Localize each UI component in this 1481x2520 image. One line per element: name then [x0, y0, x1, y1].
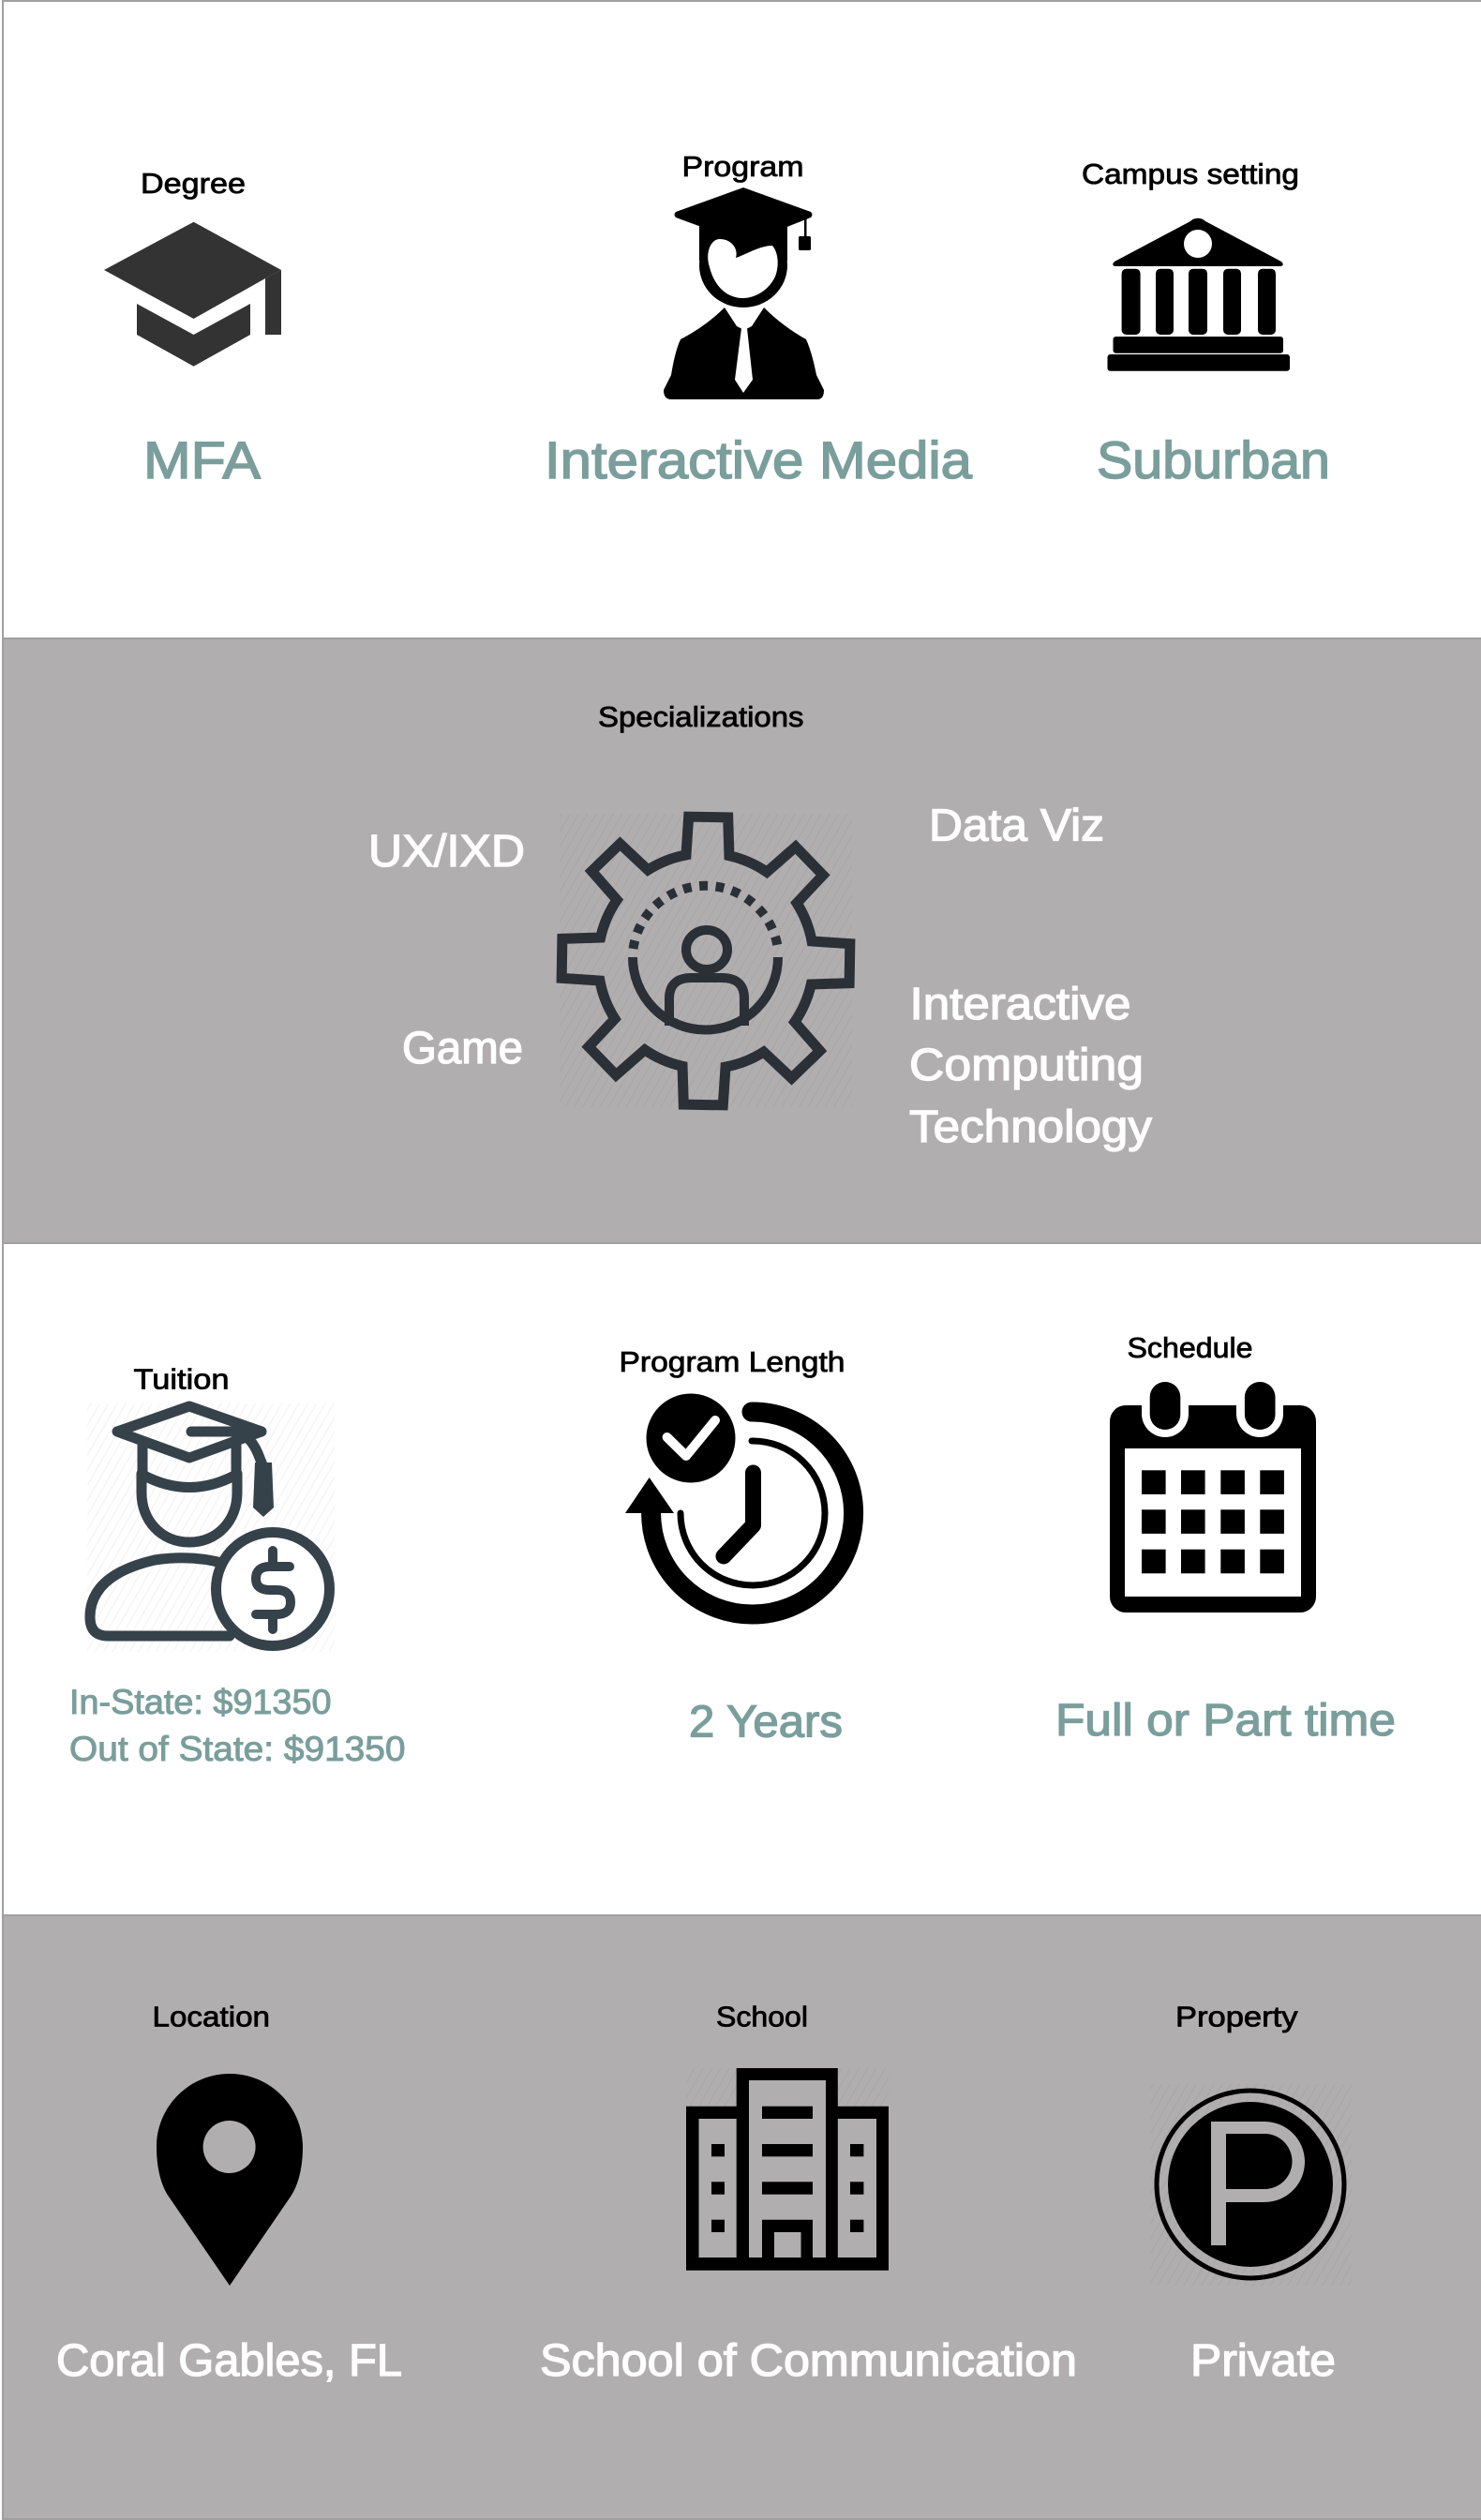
- heading: Schedule: Schedule: [1127, 1331, 1252, 1364]
- heading: Tuition: Tuition: [133, 1363, 229, 1396]
- heading: Degree: Degree: [141, 167, 246, 200]
- text: Interactive Computing Technology: Technology: [909, 1102, 1152, 1152]
- icon: mortarboard: [104, 222, 281, 367]
- heading: School: School: [716, 2001, 808, 2033]
- value: Interactive Media: Interactive Media: [545, 430, 973, 489]
- heading: Program Length: Program Length: [619, 1345, 845, 1378]
- icon: campus building: [1108, 218, 1290, 371]
- text: Interactive Computing Technology: Computing: [909, 1041, 1144, 1090]
- icon: calendar: [1110, 1382, 1316, 1612]
- icon: map pin: [157, 2074, 303, 2286]
- icon: P in circle: [1150, 2084, 1352, 2286]
- text: Game: Game: [402, 1024, 523, 1073]
- value: 2 Years: 2 Years: [689, 1697, 843, 1748]
- heading: Program: Program: [682, 150, 804, 183]
- value: MFA: MFA: [143, 430, 262, 489]
- icon: school building: [686, 2068, 889, 2271]
- icon: gear with person: [560, 814, 852, 1107]
- text: Data Viz: Data Viz: [929, 801, 1104, 851]
- heading: Location: Location: [152, 2001, 270, 2033]
- value: tuition amounts: Out of State: $91350: [69, 1730, 405, 1768]
- value: Suburban: Suburban: [1097, 430, 1330, 489]
- text: Interactive Computing Technology: [909, 980, 1152, 1152]
- heading: Specializations: Specializations: [598, 700, 804, 733]
- heading: Campus setting: Campus setting: [1082, 158, 1299, 190]
- value: Full or Part time: Full or Part time: [1055, 1696, 1396, 1746]
- value: tuition amounts: In-State: $91350: [69, 1683, 332, 1721]
- value: Coral Gables, FL: Coral Gables, FL: [56, 2336, 402, 2386]
- value: School of Communication: School of Communication: [540, 2336, 1077, 2386]
- value: Private: Private: [1190, 2336, 1336, 2386]
- value: tuition amounts: [69, 1683, 405, 1768]
- panel: specializations: [2, 638, 1481, 1243]
- icon: clock with checkmark: [625, 1393, 854, 1614]
- text: UX/IXD: UX/IXD: [368, 827, 525, 877]
- icon: student with dollar coin: [87, 1403, 335, 1652]
- panel: degree, program and campus setting: [2, 1, 1481, 638]
- icon: graduate: [664, 188, 824, 399]
- panel: tuition, program length and schedule: [2, 1243, 1481, 1915]
- text: Interactive Computing Technology: Interactive: [909, 980, 1130, 1029]
- heading: Property: Property: [1175, 2001, 1298, 2033]
- panel: location, school and property: [2, 1915, 1481, 2520]
